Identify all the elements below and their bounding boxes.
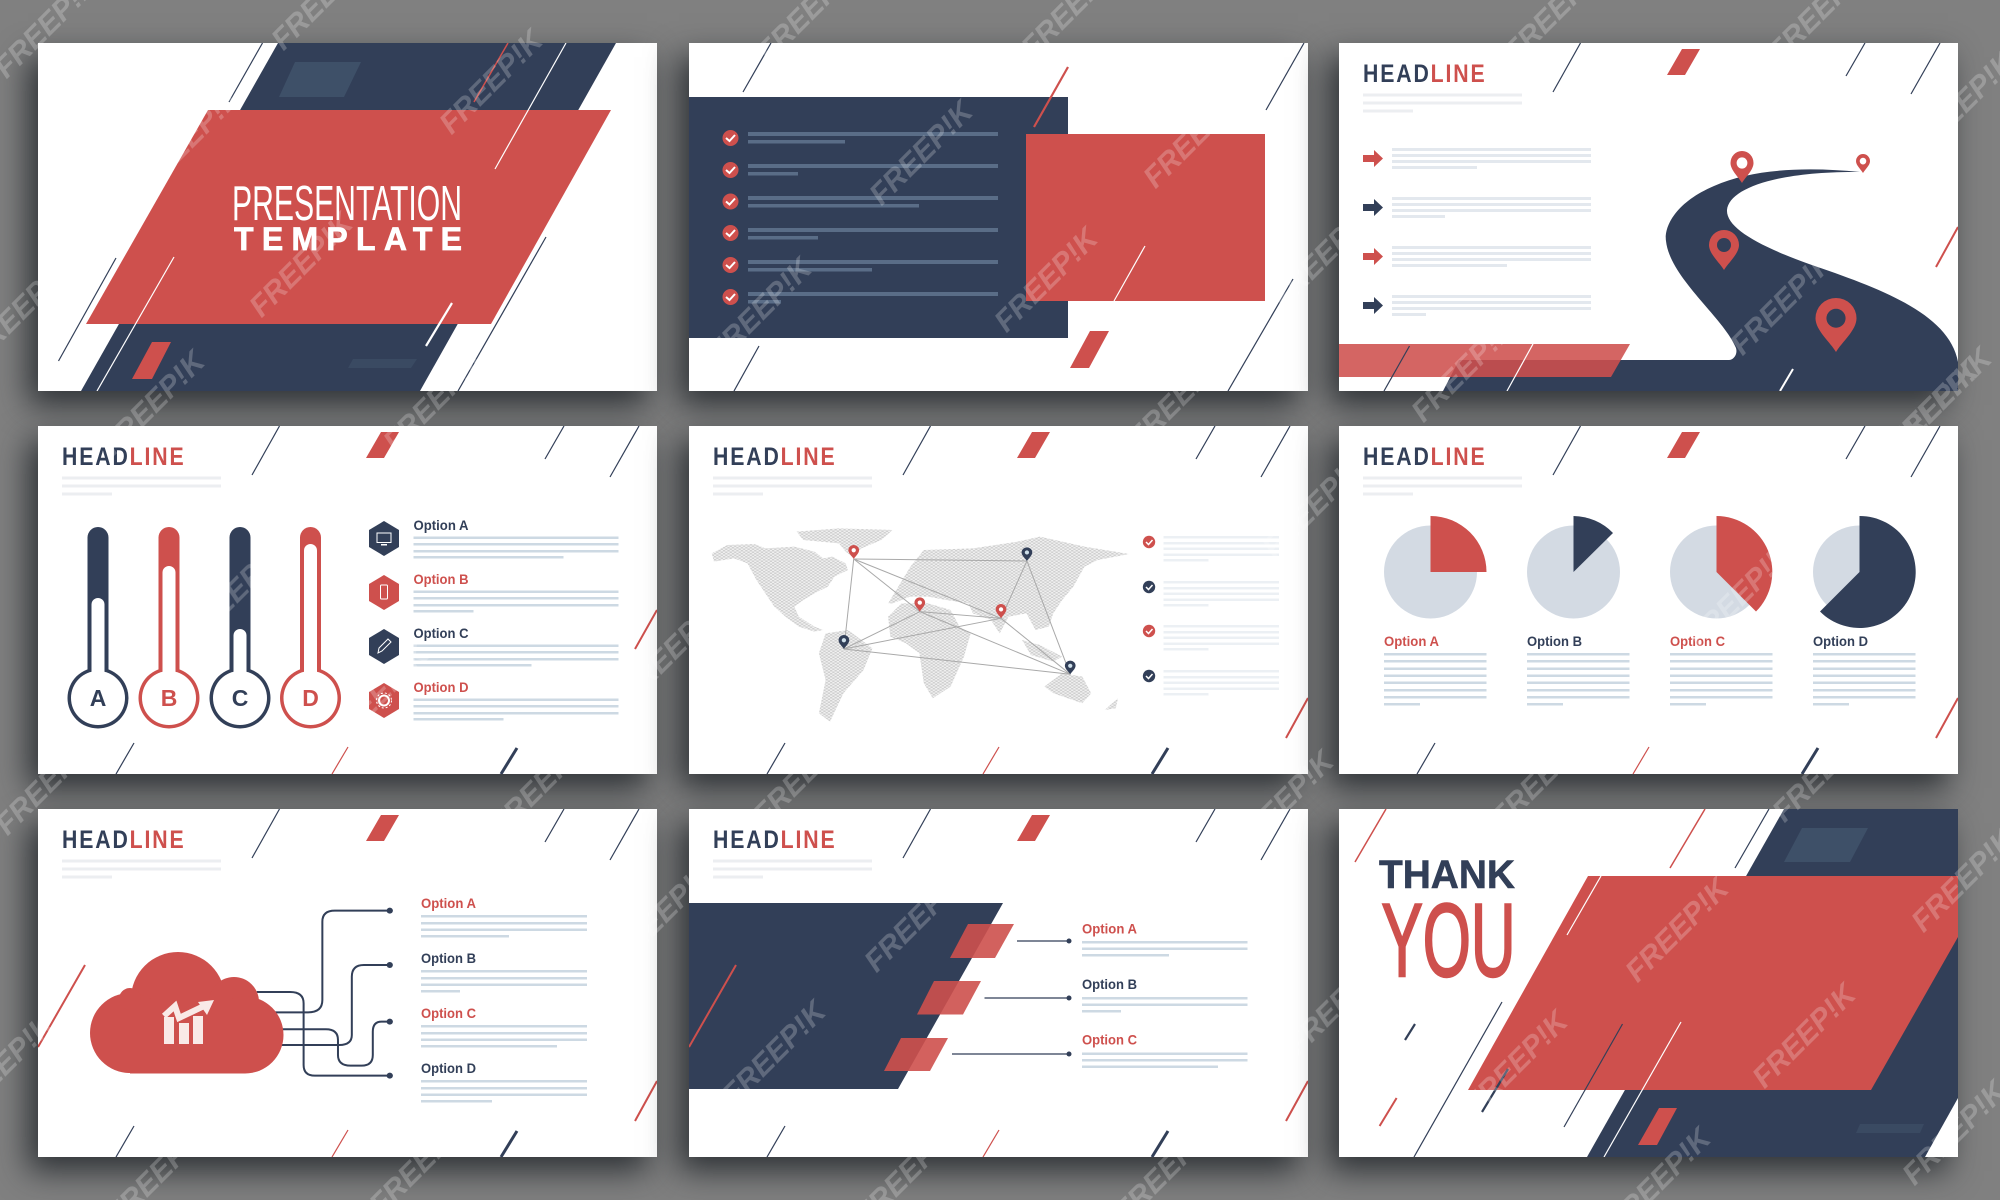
watermark layer: FREEP!K: [1265, 196, 1383, 315]
red top parallelogram: [366, 432, 399, 458]
title: thank: THANK: [1379, 853, 1515, 897]
top accents: [252, 426, 639, 477]
headline: HEADLINE: [1363, 442, 1487, 470]
option C row: Option C: [414, 625, 468, 641]
option B text: Option B: [421, 950, 476, 966]
red parallelogram: [86, 110, 611, 324]
panel: parallelogram options slide: [689, 809, 1308, 1157]
option A text: Option A: [1082, 920, 1137, 936]
chart icon: [164, 1000, 214, 1044]
red right accent: [1936, 227, 1958, 267]
diagonal accent lines: [734, 43, 1304, 391]
panel: thank you slide: [1339, 809, 1958, 1157]
watermark layer: FREEP!K: [433, 22, 551, 141]
panel: world map slide: [689, 426, 1308, 774]
watermark layer: FREEP!K: [988, 220, 1106, 339]
watermark layer: FREEP!K: [1724, 243, 1842, 362]
thermometer D: [280, 527, 341, 728]
option C text: Option C: [421, 1005, 476, 1021]
headline: HEADLINE: [713, 442, 837, 470]
panel: checklist slide: [689, 43, 1308, 391]
watermark layer: FREEP!K: [1256, 446, 1374, 565]
watermark layer: FREEP!K: [1766, 710, 1884, 829]
pie A: [1384, 516, 1486, 618]
watermark layer: FREEP!K: [1224, 743, 1342, 862]
headline: HEADLINE: [713, 825, 837, 853]
option parallelograms: [884, 924, 1014, 1071]
cloud: [90, 952, 284, 1074]
option D text: [1813, 633, 1916, 706]
option C text: Option C: [1670, 633, 1725, 649]
watermark layer: FREEP!K: [1122, 336, 1240, 455]
faded parallelogram bottom: [1856, 1124, 1924, 1133]
watermark layer: FREEP!K: [863, 93, 981, 212]
thermometer C: [210, 527, 270, 728]
option B text: Option B: [1527, 633, 1582, 649]
red top parallelogram: [1667, 49, 1700, 75]
pie C: [1670, 516, 1772, 618]
option B row: Option B: [414, 571, 468, 587]
watermark layer: FREEP!K: [243, 205, 361, 324]
navy block: [689, 97, 1068, 338]
navy block: [689, 903, 1003, 1089]
watermark layer: FREEP!K: [1485, 716, 1603, 835]
option B text: Option B: [1082, 976, 1137, 992]
panel: thermometers slide: [38, 426, 657, 774]
watermark layer: FREEP!K: [95, 343, 213, 462]
top accents: [903, 426, 1290, 477]
faded parallelogram top: [1784, 828, 1868, 862]
option A row: [369, 517, 618, 558]
pin 1: [1730, 151, 1754, 183]
top accents: [1553, 43, 1940, 94]
title: you: YOU: [1382, 883, 1516, 999]
edge and bottom accents: [116, 610, 657, 774]
edge and bottom accents: [1417, 698, 1958, 774]
faded parallelogram top: [279, 62, 361, 97]
pin 2: [1856, 154, 1870, 173]
watermark layer: FREEP!K: [1405, 310, 1523, 429]
headline subtext: [62, 860, 221, 878]
top accents: [1553, 426, 1940, 477]
red top parallelogram: [1017, 432, 1050, 458]
faded parallelogram bottom: [348, 359, 417, 368]
red block: [1026, 134, 1265, 301]
headline: HEADLINE: [62, 442, 186, 470]
title: template: TEMPLATE: [234, 221, 462, 257]
panel: title slide: [38, 43, 657, 391]
headline subtext: [62, 476, 221, 496]
option C text: Option C: [1082, 1032, 1137, 1048]
accent line red top: [474, 43, 508, 102]
thermometer B: [138, 527, 200, 728]
watermark layer: FREEP!K: [377, 340, 495, 459]
top accents: [903, 809, 1290, 860]
panel: cloud slide: [38, 809, 657, 1157]
headline subtext: [1363, 94, 1522, 112]
watermark layer: FREEP!K: [614, 590, 732, 709]
watermark layer: FREEP!K: [858, 860, 976, 979]
watermark layer: FREEP!K: [1458, 1003, 1576, 1122]
red accent on band: [1638, 1108, 1677, 1145]
panel: roadmap slide: [1339, 43, 1958, 391]
watermark layer: FREEP!K: [131, 78, 249, 197]
red accent on band: [132, 342, 171, 379]
watermark layer: FREEP!K: [1681, 536, 1799, 655]
option D text: Option D: [1813, 633, 1868, 649]
watermark layer: FREEP!K: [1869, 353, 1987, 472]
bottom lines: [1384, 344, 1533, 391]
watermark layer: FREEP!K: [747, 713, 865, 832]
watermark layer: FREEP!K: [716, 993, 834, 1112]
edge and bottom accents: [38, 965, 657, 1157]
edge and bottom accents: [689, 965, 1308, 1157]
map legend checklist: [1143, 536, 1279, 696]
pie D: [1813, 516, 1916, 628]
watermark layer: FREEP!K: [1619, 870, 1737, 989]
watermark layer: FREEP!K: [319, 636, 437, 755]
diagonal accent lines: [1355, 809, 1769, 1157]
pin 3: [1709, 230, 1739, 270]
option C row: [369, 625, 618, 666]
thermometer C: C: [232, 685, 248, 711]
headline subtext: [713, 860, 872, 878]
option A text: Option A: [421, 895, 476, 911]
option D row: Option D: [414, 679, 468, 695]
winding road: [1443, 169, 1958, 391]
thermometer D: D: [302, 685, 319, 711]
navy band: [1587, 809, 1958, 1157]
red bottom band: [1339, 344, 1630, 377]
option D row: [369, 679, 618, 720]
watermark layer: FREEP!K: [702, 250, 820, 369]
red top parallelogram: [366, 815, 399, 841]
option D text: Option D: [421, 1060, 476, 1076]
watermark layer: FREEP!K: [1882, 340, 2000, 459]
red parallelogram: [1468, 876, 1958, 1090]
headline: HEADLINE: [62, 825, 186, 853]
headline subtext: [1363, 476, 1522, 496]
watermark layer: FREEP!K: [1280, 943, 1398, 1062]
headline subtext: [713, 476, 872, 496]
watermark layer: FREEP!K: [176, 533, 294, 652]
pin 4: [1816, 298, 1857, 352]
arrow list: [1363, 148, 1591, 316]
option B text: [1527, 633, 1630, 706]
diagonal accent lines: [58, 43, 566, 391]
dotted world map with network: [712, 528, 1129, 722]
connector lines: [257, 908, 393, 1079]
top accents: [252, 809, 639, 860]
red top parallelogram: [1667, 432, 1700, 458]
thermometer A: A: [90, 685, 106, 711]
red accent: [1070, 331, 1109, 368]
road slash: [1780, 369, 1793, 391]
watermark layer: FREEP!K: [1137, 76, 1255, 195]
option A text: Option A: [1384, 633, 1439, 649]
checklist items: [722, 130, 998, 305]
thermometer B: B: [161, 685, 177, 711]
edge and bottom accents: [767, 698, 1308, 774]
title: presentation: PRESENTATION: [232, 177, 462, 231]
option A text: [1384, 633, 1486, 706]
panel: pie charts slide: [1339, 426, 1958, 774]
connectors: [952, 938, 1072, 1056]
thermometer A: [68, 527, 128, 728]
watermark layer: FREEP!K: [484, 723, 602, 842]
watermark layer: FREEP!K: [605, 853, 723, 972]
option B row: [369, 571, 618, 612]
option A row: Option A: [414, 517, 468, 533]
option C text: [1670, 633, 1772, 706]
navy diagonal band: [81, 43, 616, 391]
red top parallelogram: [1017, 815, 1050, 841]
pie B: [1527, 516, 1620, 618]
headline: HEADLINE: [1363, 59, 1487, 87]
watermark layer: FREEP!K: [1746, 976, 1864, 1095]
